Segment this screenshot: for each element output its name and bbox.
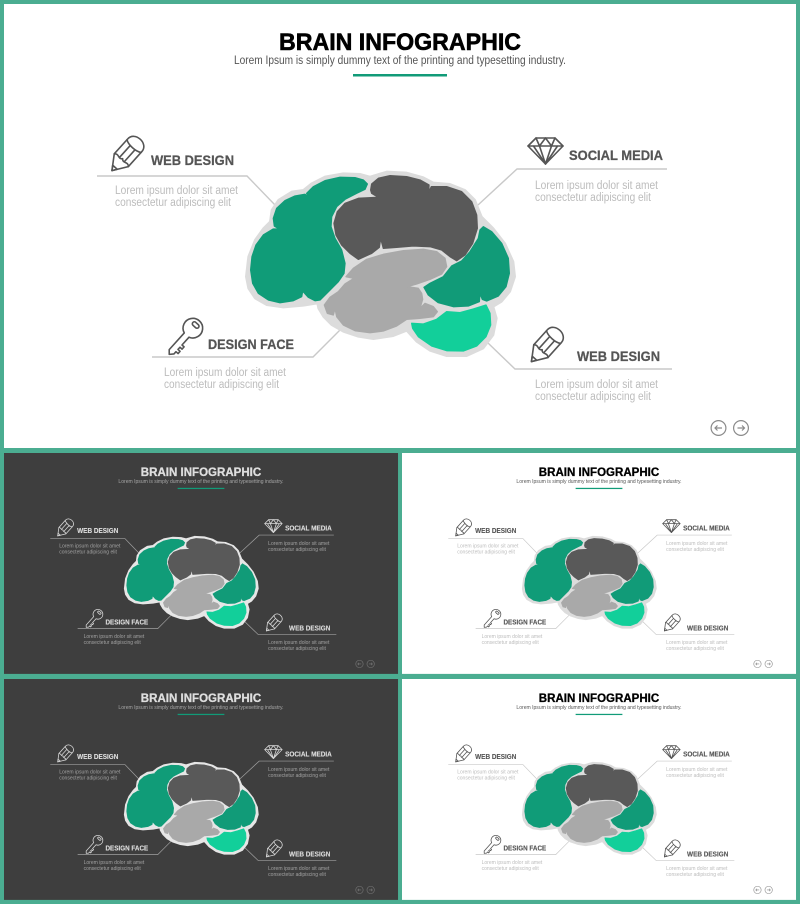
title underline — [576, 488, 622, 489]
heading: design face: DESIGN FACE — [105, 846, 149, 853]
panel: main slide — [4, 4, 796, 448]
text block: web design right: Lorem ipsum dolor sit amet — [666, 640, 728, 646]
heading: web design right: WEB DESIGN — [289, 852, 330, 859]
text block: web design right — [666, 640, 728, 652]
heading: design face: DESIGN FACE — [503, 620, 547, 627]
panel: light thumbnail bottom — [402, 679, 796, 900]
heading: social media: SOCIAL MEDIA — [683, 526, 730, 533]
icon: key — [83, 833, 105, 857]
subtitle: Lorem Ipsum is simply dummy text of the printing and typesetting industry. — [118, 479, 284, 485]
text block: design face: Lorem ipsum dolor sit amet — [482, 860, 543, 866]
title underline — [353, 74, 447, 76]
text block: social media: consectetur adipiscing elit — [666, 773, 724, 779]
subtitle: Lorem Ipsum is simply dummy text of the printing and typesetting industry. — [234, 55, 566, 67]
text block: web design: consectetur adipiscing elit — [457, 549, 515, 555]
connectors — [50, 535, 336, 635]
connector: web design — [97, 176, 275, 205]
title underline — [178, 714, 224, 715]
text block: social media: Lorem ipsum dolor sit amet — [535, 180, 659, 192]
text block: web design right — [535, 379, 659, 403]
heading: social media: SOCIAL MEDIA — [285, 752, 332, 759]
text block: design face: consectetur adipiscing elit — [482, 866, 539, 872]
subtitle: Lorem Ipsum is simply dummy text of the printing and typesetting industry. — [118, 705, 284, 711]
brain diagram — [522, 536, 656, 628]
icon: key — [481, 607, 503, 631]
text block: social media: consectetur adipiscing elit — [268, 773, 326, 779]
heading: design face: DESIGN FACE — [105, 620, 149, 627]
text block: web design right — [268, 640, 330, 652]
subtitle: Lorem Ipsum is simply dummy text of the printing and typesetting industry. — [516, 479, 682, 485]
text block: social media — [666, 767, 728, 779]
icon: diamond — [663, 520, 680, 533]
heading: web design right: WEB DESIGN — [577, 348, 660, 364]
text block: social media — [666, 541, 728, 553]
text block: web design: Lorem ipsum dolor sit amet — [457, 544, 519, 550]
connector: design face — [152, 330, 340, 357]
text block: social media: Lorem ipsum dolor sit amet — [666, 767, 728, 773]
text block: web design right: consectetur adipiscing elit — [268, 872, 326, 878]
text block: social media: consectetur adipiscing elit — [666, 547, 724, 553]
panel: dark thumbnail bottom — [4, 679, 398, 900]
text block: web design — [457, 770, 519, 781]
navigation arrows — [754, 886, 772, 894]
text block: social media: consectetur adipiscing elit — [535, 192, 652, 204]
navigation arrows — [754, 660, 772, 668]
text block: social media — [268, 541, 330, 553]
text block: web design right: consectetur adipiscing elit — [268, 646, 326, 652]
heading: web design: WEB DESIGN — [151, 152, 234, 168]
text block: design face: Lorem ipsum dolor sit amet — [84, 634, 145, 640]
connector: social media — [478, 169, 667, 205]
panel: light thumbnail top — [402, 453, 796, 674]
icon: pencil — [54, 743, 75, 765]
heading: design face: DESIGN FACE — [208, 336, 294, 352]
text block: social media: Lorem ipsum dolor sit amet — [666, 541, 728, 547]
text block: social media: Lorem ipsum dolor sit amet — [268, 541, 330, 547]
text block: web design right: Lorem ipsum dolor sit amet — [268, 640, 330, 646]
title underline — [178, 488, 224, 489]
text block: web design: Lorem ipsum dolor sit amet — [457, 770, 519, 776]
panel: dark thumbnail top — [4, 453, 398, 674]
icon: pencil — [452, 743, 473, 765]
navigation arrows — [356, 660, 374, 668]
heading: web design: WEB DESIGN — [475, 754, 516, 761]
heading: web design: WEB DESIGN — [77, 528, 118, 535]
text block: web design right: Lorem ipsum dolor sit amet — [535, 379, 659, 391]
text block: web design: consectetur adipiscing elit — [59, 775, 117, 781]
subtitle: Lorem Ipsum is simply dummy text of the printing and typesetting industry. — [516, 705, 682, 711]
icon: diamond — [663, 746, 680, 759]
heading: social media: SOCIAL MEDIA — [683, 752, 730, 759]
text block: design face — [164, 367, 287, 391]
text block: social media: Lorem ipsum dolor sit amet — [268, 767, 330, 773]
brain diagram — [246, 172, 515, 356]
heading: web design right: WEB DESIGN — [687, 852, 728, 859]
icon: pencil — [54, 517, 75, 539]
text block: web design: Lorem ipsum dolor sit amet — [115, 185, 239, 197]
icon: key — [481, 833, 503, 857]
title: BRAIN INFOGRAPHIC — [141, 465, 262, 479]
text block: design face: Lorem ipsum dolor sit amet — [84, 860, 145, 866]
text block: social media — [268, 767, 330, 779]
text block: web design: Lorem ipsum dolor sit amet — [59, 544, 121, 550]
text block: web design right: Lorem ipsum dolor sit amet — [666, 866, 728, 872]
text block: design face: Lorem ipsum dolor sit amet — [164, 367, 287, 379]
icon: pencil right — [263, 612, 284, 634]
icon: pencil — [105, 133, 147, 177]
navigation arrows — [711, 421, 748, 435]
connector: web design right — [488, 343, 672, 369]
text block: web design — [59, 544, 121, 555]
text block: design face: Lorem ipsum dolor sit amet — [482, 634, 543, 640]
icon: key — [162, 314, 207, 361]
icon: diamond — [528, 138, 563, 164]
icon: key — [83, 607, 105, 631]
text block: web design — [457, 544, 519, 555]
text block: design face: consectetur adipiscing elit — [164, 379, 280, 391]
icon: pencil right — [263, 838, 284, 860]
brain diagram — [124, 762, 258, 854]
text block: web design right: consectetur adipiscing elit — [535, 391, 652, 403]
heading: web design: WEB DESIGN — [77, 754, 118, 761]
text block: web design — [115, 185, 239, 209]
heading: web design right: WEB DESIGN — [687, 626, 728, 633]
heading: social media: SOCIAL MEDIA — [569, 147, 663, 163]
text block: design face: consectetur adipiscing elit — [84, 640, 141, 646]
navigation arrows — [356, 886, 374, 894]
title underline — [576, 714, 622, 715]
text block: design face — [482, 634, 543, 646]
icon: pencil right — [661, 612, 682, 634]
title: BRAIN INFOGRAPHIC — [539, 465, 660, 479]
text block: social media: consectetur adipiscing elit — [268, 547, 326, 553]
text block: web design right — [666, 866, 728, 878]
icon: pencil — [452, 517, 473, 539]
title: BRAIN INFOGRAPHIC — [279, 29, 521, 56]
icon: pencil right — [661, 838, 682, 860]
text block: web design: consectetur adipiscing elit — [59, 549, 117, 555]
connectors — [448, 761, 734, 861]
icon: diamond — [265, 520, 282, 533]
text block: web design right — [268, 866, 330, 878]
text block: web design: Lorem ipsum dolor sit amet — [59, 770, 121, 776]
brain diagram — [522, 762, 656, 854]
text block: social media — [535, 180, 659, 204]
text block: web design — [59, 770, 121, 781]
text block: web design right: consectetur adipiscing elit — [666, 872, 724, 878]
brain diagram — [124, 536, 258, 628]
connectors — [50, 761, 336, 861]
text block: design face — [84, 634, 145, 646]
connectors — [448, 535, 734, 635]
text block: design face: consectetur adipiscing elit — [84, 866, 141, 872]
text block: web design: consectetur adipiscing elit — [115, 197, 232, 209]
text block: design face — [84, 860, 145, 872]
icon: diamond — [265, 746, 282, 759]
text block: web design: consectetur adipiscing elit — [457, 775, 515, 781]
text block: web design right: Lorem ipsum dolor sit amet — [268, 866, 330, 872]
text block: web design right: consectetur adipiscing elit — [666, 646, 724, 652]
heading: design face: DESIGN FACE — [503, 846, 547, 853]
heading: social media: SOCIAL MEDIA — [285, 526, 332, 533]
heading: web design right: WEB DESIGN — [289, 626, 330, 633]
text block: design face — [482, 860, 543, 872]
title: BRAIN INFOGRAPHIC — [539, 691, 660, 705]
icon: pencil right — [524, 324, 567, 368]
text block: design face: consectetur adipiscing elit — [482, 640, 539, 646]
heading: web design: WEB DESIGN — [475, 528, 516, 535]
title: BRAIN INFOGRAPHIC — [141, 691, 262, 705]
